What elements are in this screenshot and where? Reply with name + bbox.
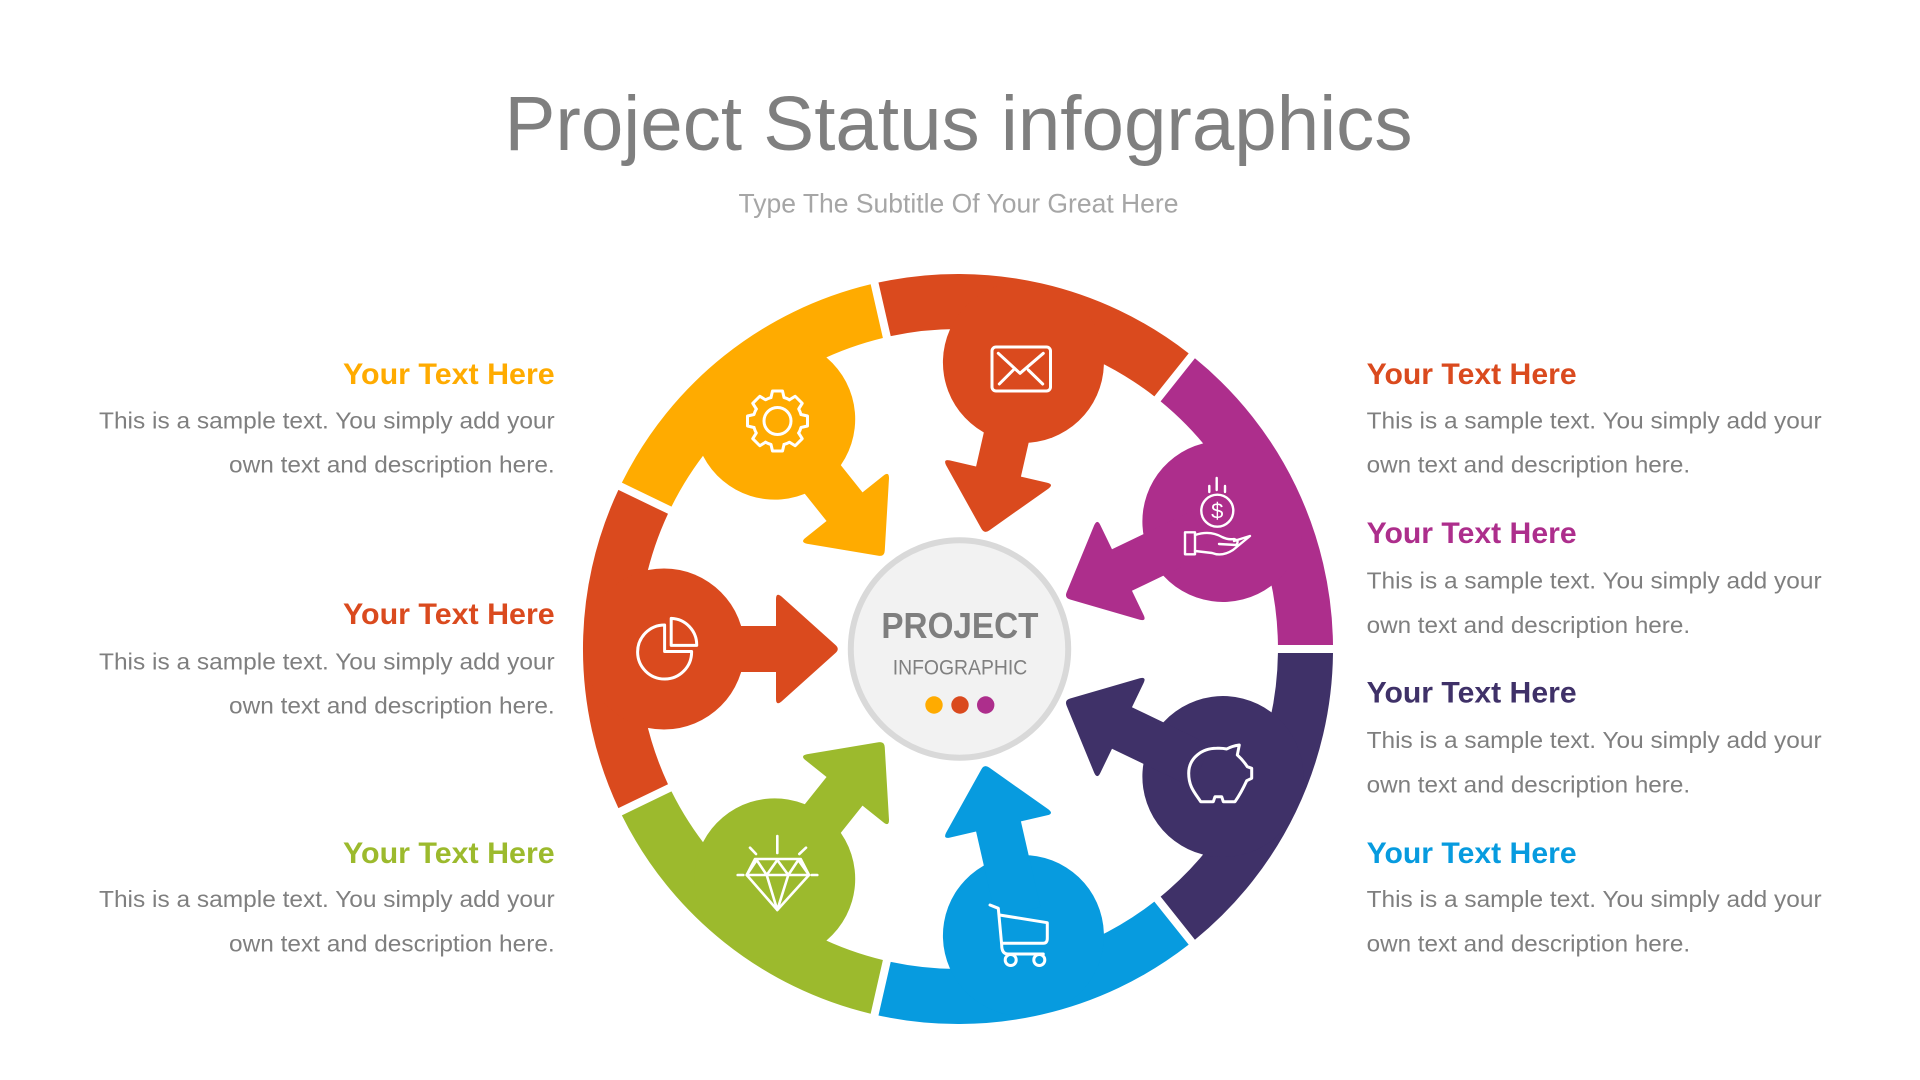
text block: right 1 red: This is a sample text. You simply add your (1367, 407, 1822, 433)
icon: diamond (738, 836, 817, 910)
text block: right 3 navy (1367, 676, 1822, 797)
text block: left 1 orange (99, 358, 555, 478)
segment: orange gear (600, 257, 1007, 654)
segment: green diamond (600, 644, 1007, 1041)
text block: left 1 orange: Your Text Here (343, 358, 555, 391)
title: Project Status infographics (504, 81, 1412, 167)
text block: right 1 red: own text and description here. (1367, 452, 1690, 478)
text block: left 3 green: Your Text Here (343, 837, 555, 870)
icon: envelope (992, 347, 1050, 391)
text block: right 3 navy: Your Text Here (1367, 676, 1577, 709)
icon: coin in hand (1185, 478, 1250, 554)
text block: left 2 red: own text and description here. (229, 693, 555, 719)
icon: coin in hand: $ (1211, 498, 1223, 524)
segment: red envelope (830, 248, 1197, 567)
text block: left 1 orange: own text and description here. (229, 452, 555, 478)
text block: right 1 red: Your Text Here (1367, 358, 1577, 391)
segment: purple money (997, 343, 1365, 740)
text block: right 2 purple: Your Text Here (1367, 517, 1577, 550)
center subheading: INFOGRAPHIC (893, 656, 1027, 680)
icon: piggy bank (1189, 745, 1252, 802)
text block: right 4 blue: own text and description here. (1367, 930, 1690, 956)
text block: left 3 green: own text and description here. (229, 930, 555, 956)
text block: right 4 blue (1367, 837, 1822, 956)
text block: left 2 red: This is a sample text. You simply add your (99, 648, 555, 674)
text block: right 2 purple: This is a sample text. You simply add your (1367, 568, 1822, 594)
text block: left 2 red: Your Text Here (343, 598, 555, 631)
text block: right 3 navy: This is a sample text. You simply add your (1367, 727, 1822, 753)
center dots (925, 696, 994, 714)
text block: right 2 purple (1367, 517, 1822, 638)
text block: right 4 blue: Your Text Here (1367, 837, 1577, 870)
text block: left 3 green: This is a sample text. You simply add your (99, 886, 555, 912)
text block: right 4 blue: This is a sample text. You simply add your (1367, 886, 1822, 912)
text block: left 1 orange: This is a sample text. You simply add your (99, 407, 555, 433)
text block: right 2 purple: own text and description here. (1367, 612, 1690, 638)
text block: right 1 red (1367, 358, 1822, 478)
text block: left 2 red (99, 598, 555, 719)
icon: gear (748, 391, 808, 451)
icon: pie chart (638, 618, 697, 679)
center badge (851, 540, 1068, 758)
segment: red pie chart (583, 490, 838, 808)
subtitle: Type The Subtitle Of Your Great Here (738, 189, 1178, 219)
text block: left 3 green (99, 837, 555, 956)
text block: right 3 navy: own text and description here. (1367, 771, 1690, 797)
center heading: PROJECT (881, 605, 1038, 646)
segment: navy piggy bank (997, 558, 1365, 955)
segment: blue cart (830, 731, 1197, 1050)
icon: shopping cart (990, 905, 1047, 966)
